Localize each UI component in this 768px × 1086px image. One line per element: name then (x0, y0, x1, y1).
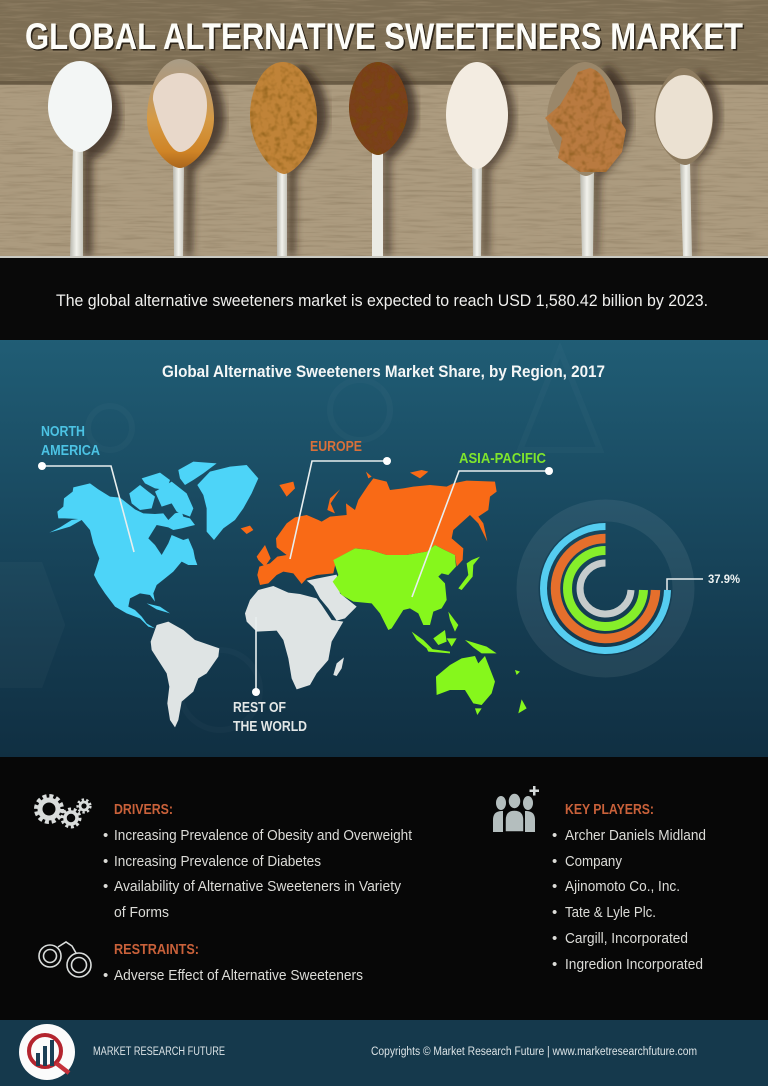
world map (49, 462, 527, 727)
heading: key players: KEY PLAYERS: (565, 801, 654, 818)
region: Rest of the World (151, 575, 357, 727)
spoon 5: white powder (446, 62, 515, 256)
list: key players: Tate & Lyle Plc. (565, 904, 656, 921)
icon: handcuffs (39, 942, 91, 977)
leader line: Rest of the World (252, 617, 260, 696)
list: drivers: • (103, 853, 108, 870)
spoon 3: brown sugar (250, 62, 328, 256)
panel: drivers, restraints and key players (0, 757, 768, 1020)
label: Rest of the World (233, 700, 307, 735)
label: Rest of the World: THE WORLD (233, 719, 307, 735)
list: drivers: • (103, 878, 108, 895)
list: key players: • (552, 904, 557, 921)
label: North America: NORTH (41, 424, 85, 440)
callout: 37.9%: 37.9% (708, 574, 740, 586)
panel heading: Global Alternative Sweeteners Market Share, by Region, 2017 (162, 362, 605, 381)
list: key players: • (552, 930, 557, 947)
footer (0, 1020, 768, 1086)
list: key players: Archer Daniels Midland (565, 827, 706, 844)
region: Europe and Russia (241, 470, 497, 585)
list: key players: Cargill, Incorporated (565, 930, 688, 947)
leader line: Europe (290, 457, 391, 559)
list: drivers: Increasing Prevalence of Obesity and Overweight (114, 827, 413, 844)
icon: gears (36, 796, 90, 827)
brand name: MARKET RESEARCH FUTURE (93, 1046, 225, 1058)
heading: restraints: RESTRAINTS: (114, 941, 199, 958)
bar: Asia-Pacific (568, 550, 644, 626)
list: drivers: Increasing Prevalence of Diabetes (114, 853, 321, 870)
spoon 2: honey (147, 59, 225, 256)
list: key players: • (552, 878, 557, 895)
summary text: The global alternative sweeteners market is expected to reach USD 1,580.42 billion by 2023. (56, 291, 708, 310)
radial bar chart (528, 510, 740, 666)
spoon 1: white sugar (48, 61, 121, 256)
list: key players: Company (565, 853, 622, 870)
list: drivers (103, 827, 413, 921)
bar: Rest of the World (580, 563, 631, 614)
summary band (0, 256, 768, 340)
list: key players: • (552, 853, 557, 870)
hero photo: spoons on wooden table (0, 0, 768, 256)
list: drivers: of Forms (114, 904, 169, 921)
region: Asia-Pacific (333, 545, 527, 715)
list: drivers: • (103, 827, 108, 844)
copyright: Copyrights © Market Research Future | www.marketresearchfuture.com (371, 1046, 697, 1058)
spoon 4: dark brown sugar (349, 62, 417, 256)
logo (19, 1024, 75, 1080)
leader line: North America (38, 462, 134, 552)
leader line: Asia-Pacific (412, 467, 553, 597)
list: key players (552, 827, 706, 973)
list: key players: • (552, 956, 557, 973)
region: North America (49, 462, 258, 628)
label: Asia-Pacific: ASIA-PACIFIC (459, 451, 546, 467)
list: key players: Ajinomoto Co., Inc. (565, 878, 680, 895)
bar: North America (544, 526, 668, 650)
icon: people with plus (493, 786, 539, 832)
list: drivers: Availability of Alternative Sweeteners in Variety (114, 878, 401, 895)
list: restraints: Adverse Effect of Alternative Sweeteners (114, 967, 363, 984)
list: restraints: • (103, 967, 108, 984)
callout: 37.9% (667, 574, 740, 590)
label: North America: AMERICA (41, 443, 100, 459)
spoon 7: pale sugar (654, 68, 721, 256)
label: Europe: EUROPE (310, 439, 362, 455)
bar: Europe (556, 538, 656, 638)
list: key players: Ingredion Incorporated (565, 956, 703, 973)
spoon 6: rock sugar crystals (545, 62, 632, 256)
label: North America (41, 424, 100, 459)
label: Rest of the World: REST OF (233, 700, 286, 716)
panel: regional market share (0, 340, 768, 757)
heading: drivers: DRIVERS: (114, 801, 173, 818)
list: key players: • (552, 827, 557, 844)
